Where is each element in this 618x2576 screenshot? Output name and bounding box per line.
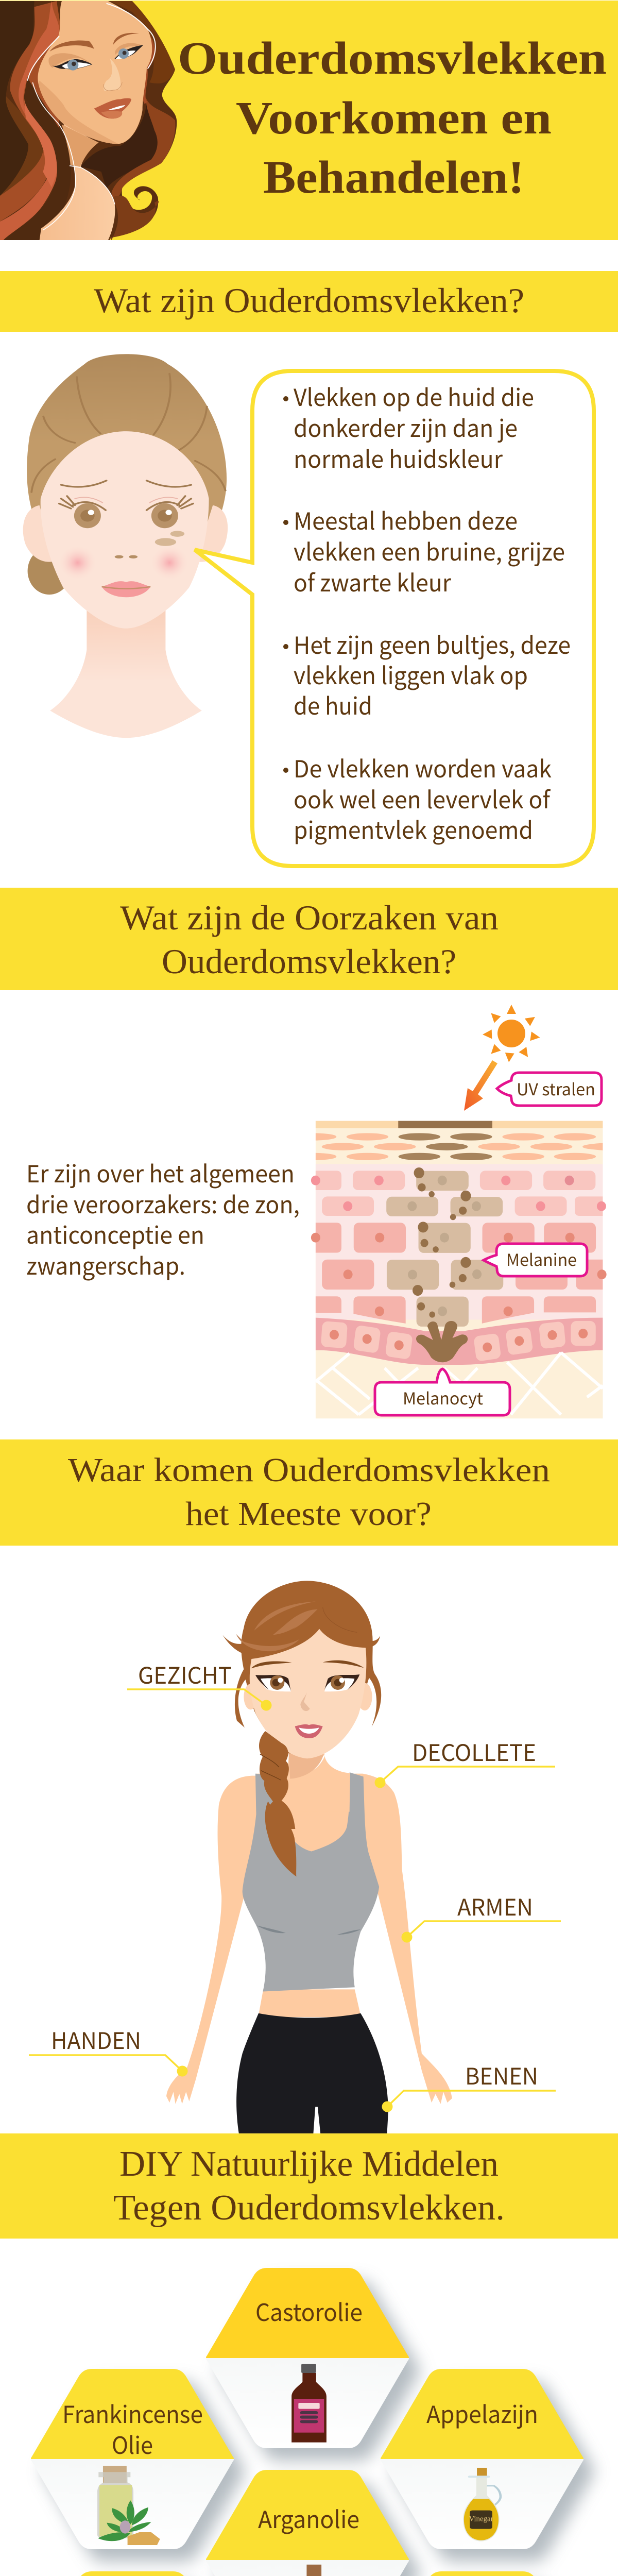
panel: arganolie: Arganolie <box>258 2501 359 2535</box>
icon: vinegar cruet <box>463 2468 501 2541</box>
panel: frankincense olie <box>31 2369 234 2549</box>
marker: gezicht <box>127 1657 272 1710</box>
section heading: DIY: DIY Natuurlijke Middelen <box>119 2144 499 2184</box>
illustration: worried face with spots <box>23 354 228 738</box>
markers: body area labels <box>29 1657 561 2112</box>
panel: frankincense olie: Frankincense <box>62 2396 203 2430</box>
bullet: kleur: vlekken een bruine, grijze <box>294 534 565 568</box>
label: Melanine <box>484 1244 587 1276</box>
bullet: bultjes <box>283 627 571 722</box>
section heading: oorzaken: Ouderdomsvlekken? <box>162 942 456 981</box>
marker: decollete: DECOLLETE <box>412 1735 536 1768</box>
section heading: DIY: Tegen Ouderdomsvlekken. <box>113 2188 505 2228</box>
panel: arganolie <box>206 2470 409 2576</box>
icon: oil jar with leaves <box>97 2466 160 2545</box>
section heading: wat zijn: Wat zijn Ouderdomsvlekken? <box>94 281 524 320</box>
illustration: woman body figure <box>166 1581 452 2133</box>
skin layers diagram <box>311 1073 607 1418</box>
text: drie veroorzakers: zwangerschap. <box>26 1248 185 1282</box>
panel: appelazijn <box>381 2369 583 2549</box>
bullet: levervlek: ook wel een levervlek of <box>294 782 551 816</box>
illustration: woman with red-brown hair <box>0 1 177 240</box>
icon: castor oil bottle <box>291 2364 327 2443</box>
title: Behandelen! <box>263 152 524 203</box>
text: drie veroorzakers: drie veroorzakers: de zon, <box>26 1187 300 1221</box>
section heading: waar komen <box>0 1439 618 1546</box>
label: Melanocyt <box>375 1369 510 1415</box>
section heading: waar komen: het Meeste voor? <box>185 1495 432 1533</box>
section heading: oorzaken <box>0 888 618 990</box>
bullet: bultjes: de huid <box>294 688 372 722</box>
bullet: bultjes: vlekken liggen vlak op <box>294 657 528 691</box>
marker: armen <box>402 1889 561 1942</box>
marker: handen <box>29 2023 187 2076</box>
panel: yoghurt <box>31 2571 234 2576</box>
label: UV stralen <box>497 1073 602 1106</box>
hexagon shadows <box>43 2280 594 2576</box>
label: Melanocyt: Melanocyt <box>403 1386 483 1410</box>
panel: frankincense olie: Olie <box>112 2427 153 2461</box>
panel: castorolie <box>206 2268 409 2448</box>
marker: armen: ARMEN <box>457 1889 533 1922</box>
bullet: vlekken <box>283 379 534 475</box>
bullet: kleur <box>283 503 565 599</box>
marker: benen <box>382 2058 556 2112</box>
panel: castorolie: Castorolie <box>255 2294 363 2328</box>
bullet: levervlek <box>283 751 552 846</box>
bullet: vlekken: Vlekken op de huid die <box>294 379 534 413</box>
icon: vinegar cruet: Vinegar <box>469 2515 493 2523</box>
bullet: vlekken: normale huidskleur <box>294 441 503 475</box>
text: drie veroorzakers: anticonceptie en <box>26 1217 204 1251</box>
bullet: levervlek: De vlekken worden vaak <box>294 751 552 785</box>
title: Ouderdomsvlekken <box>178 33 607 84</box>
section heading: wat zijn <box>0 271 618 332</box>
text: drie veroorzakers: Er zijn over het algemeen <box>26 1156 295 1190</box>
icon: sun <box>483 1005 541 1063</box>
icon: argan oil and nuts <box>262 2565 354 2576</box>
panel: appelazijn: Appelazijn <box>426 2396 538 2430</box>
section heading: DIY <box>0 2133 618 2239</box>
panel: komkommer <box>381 2571 583 2576</box>
marker: gezicht: GEZICHT <box>138 1657 232 1690</box>
bullet: levervlek: pigmentvlek genoemd <box>294 812 533 846</box>
marker: handen: HANDEN <box>51 2023 141 2056</box>
title: Voorkomen en <box>236 93 552 144</box>
bullet: vlekken: donkerder zijn dan je <box>294 410 518 444</box>
section heading: oorzaken: Wat zijn de Oorzaken van <box>120 898 499 937</box>
callout: explanation bubble <box>195 371 594 866</box>
text: drie veroorzakers <box>26 1156 300 1282</box>
label: UV stralen: UV stralen <box>517 1077 595 1100</box>
marker: decollete <box>375 1735 555 1788</box>
arrow: UV rays <box>464 1060 497 1111</box>
section heading: waar komen: Waar komen Ouderdomsvlekken <box>68 1451 550 1489</box>
header banner <box>0 1 618 240</box>
label: Melanine: Melanine <box>506 1247 577 1271</box>
title <box>178 33 607 203</box>
bullet: kleur: Meestal hebben deze <box>294 503 518 537</box>
bullet: bultjes: Het zijn geen bultjes, deze <box>294 627 571 661</box>
marker: benen: BENEN <box>465 2058 538 2091</box>
bullet: kleur: of zwarte kleur <box>294 565 451 599</box>
